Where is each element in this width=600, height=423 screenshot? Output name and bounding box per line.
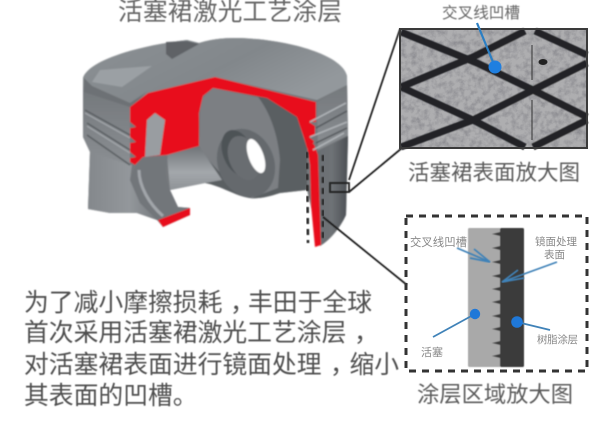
label: resin: 树脂涂层 — [537, 333, 578, 346]
interior behind section — [198, 88, 307, 198]
label: cross-hatch groove: 交叉线凹槽 — [442, 4, 520, 22]
body text: 为了减小摩擦损耗 — [24, 290, 222, 317]
label: piston: 活塞 — [421, 345, 443, 359]
arrow: mirror surface — [502, 262, 557, 282]
bridge behind window — [167, 146, 222, 190]
arrow: groove — [457, 248, 490, 262]
right ring lands — [317, 85, 348, 150]
piston window — [145, 113, 165, 157]
label: mirror surface — [535, 235, 578, 261]
body text: 其表面的凹槽。 — [24, 382, 198, 410]
caption: coating area: 涂层区域放大图 — [417, 382, 573, 407]
crown chamfer left — [84, 78, 148, 107]
left inner arch — [130, 156, 190, 222]
groove teeth — [492, 232, 500, 358]
valve pocket light — [92, 66, 152, 87]
arch highlight — [139, 170, 163, 216]
body text: ， — [354, 320, 379, 347]
piston layer — [468, 228, 501, 367]
resin layer — [500, 228, 524, 367]
body text — [24, 289, 399, 410]
skirt dashed section marks — [307, 152, 323, 243]
red skirt tip — [158, 208, 190, 227]
cross-hatch grooves — [401, 31, 587, 147]
pin bore shadow — [215, 125, 261, 181]
pointer: piston — [433, 309, 480, 337]
pin bore opening — [243, 137, 269, 175]
body text: 首次采用活塞裙激光工艺涂层 — [24, 320, 346, 347]
dashed frame — [406, 216, 587, 371]
left ring lands — [83, 90, 130, 165]
pin boss ring — [207, 120, 285, 206]
frame — [400, 29, 587, 148]
body text: 对活塞裙表面进行镜面处理 — [24, 352, 322, 379]
panel: skirt surface magnified — [400, 29, 587, 148]
left skirt outer wall — [88, 150, 157, 220]
pointer: resin — [511, 316, 550, 330]
body text: 丰田于全球 — [248, 289, 372, 317]
surface background — [400, 29, 587, 148]
red section — [130, 77, 316, 165]
coating diagram — [468, 228, 524, 367]
pin boss rib — [199, 88, 280, 198]
valve pocket dark — [166, 41, 199, 59]
right skirt outer wall — [316, 136, 348, 246]
body text: 缩小 — [350, 351, 399, 379]
label: mirror surface: 镜面处理 — [535, 235, 578, 248]
piston cutaway illustration — [83, 38, 348, 247]
pointer: cross-hatch groove — [477, 23, 502, 74]
label: mirror surface: 表面 — [544, 248, 565, 261]
surface grain — [400, 29, 587, 148]
body text: ， — [330, 352, 355, 379]
caption: skirt surface: 活塞裙表面放大图 — [408, 161, 580, 185]
scratches and pit — [531, 45, 533, 140]
body text: ， — [230, 290, 255, 317]
red skirt strip — [307, 144, 321, 247]
pin bore inner wall — [221, 131, 267, 185]
panel: coating area magnified — [406, 216, 587, 371]
ring grooves — [85, 110, 130, 165]
piston silhouette — [83, 38, 348, 246]
callout lines and locator box — [323, 29, 407, 285]
piston crown top — [83, 38, 347, 105]
label: groove: 交叉线凹槽 — [410, 235, 467, 249]
